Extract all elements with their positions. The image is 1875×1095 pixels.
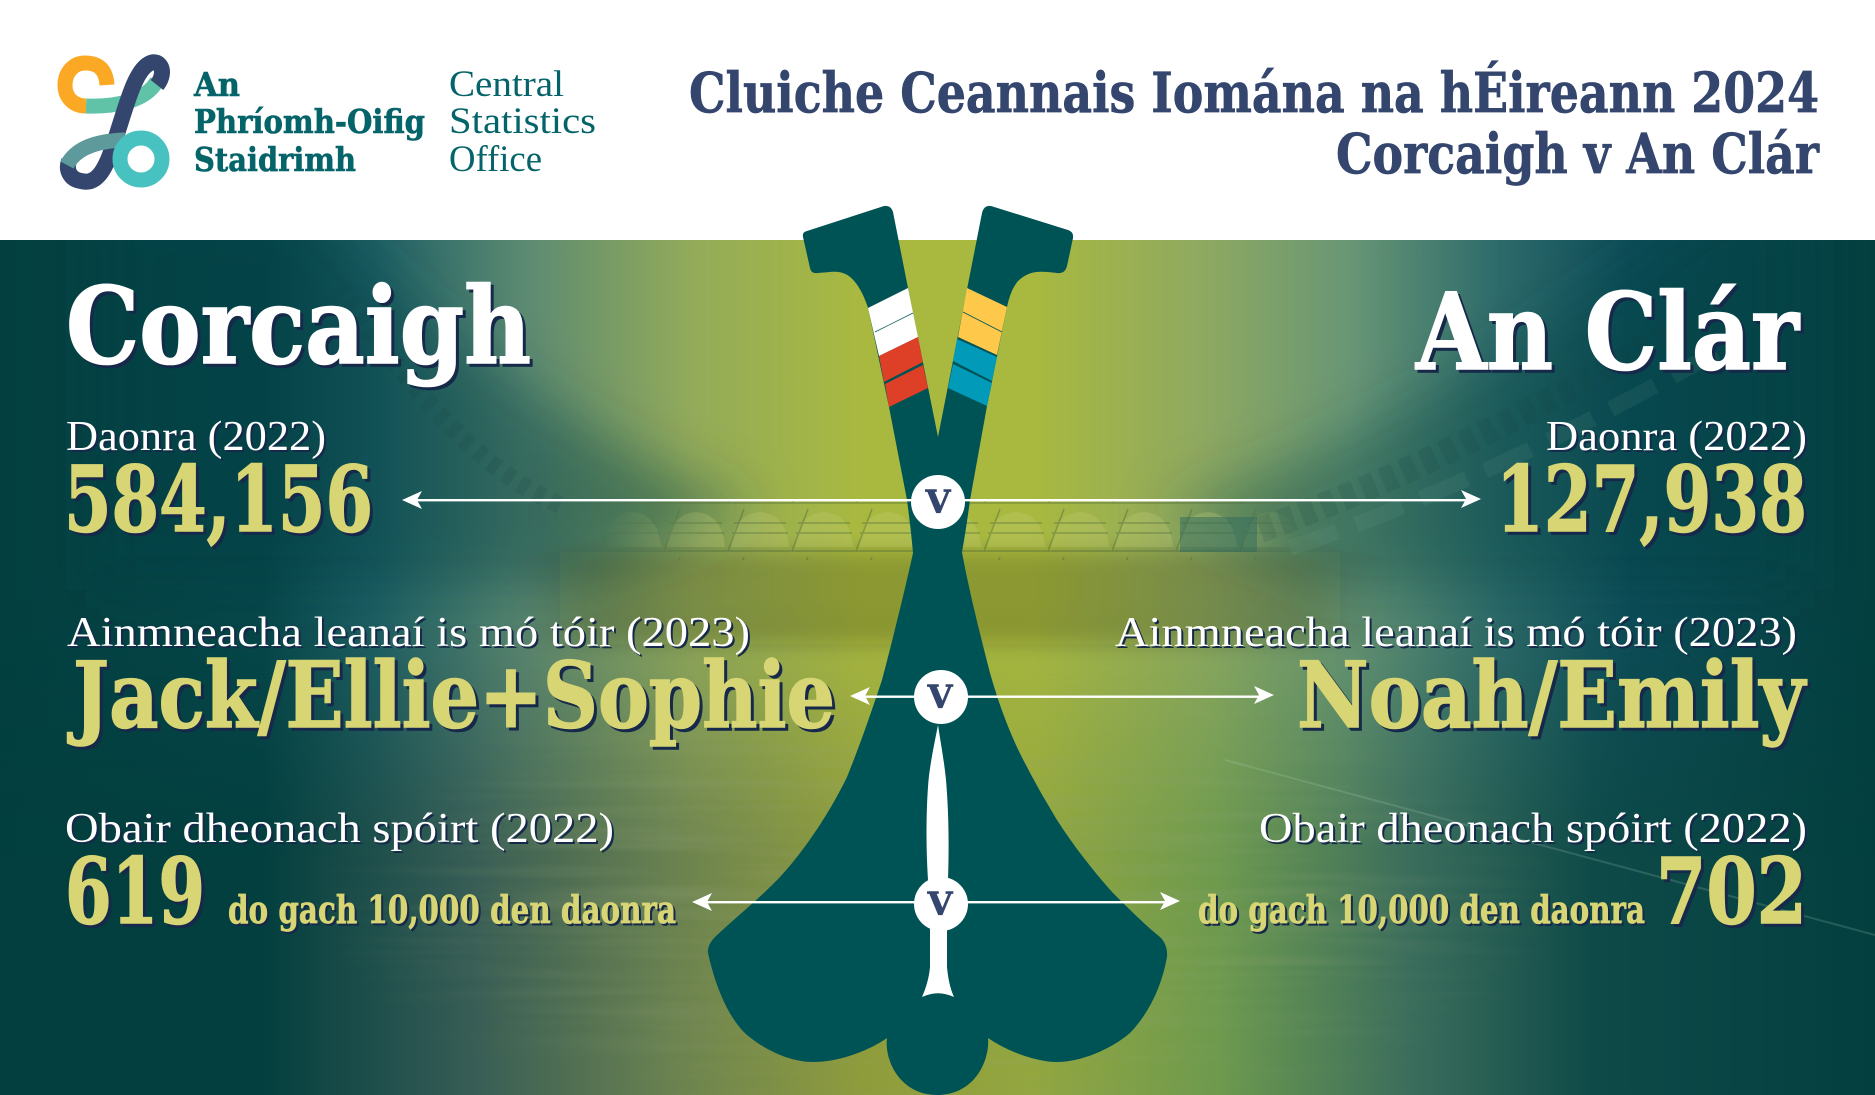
versus badge 3: V: [927, 885, 954, 923]
label: population: Daonra (2022): [1546, 414, 1807, 460]
value: population: 584,156: [64, 447, 373, 553]
value: volunteering: 619: [65, 839, 205, 945]
crossed hurleys silhouette: [708, 206, 1167, 1095]
logo text: English name: Office: [449, 139, 542, 180]
arrow: population: [402, 490, 1481, 509]
versus badge 3: [914, 877, 968, 931]
logo text: Irish name: An: [193, 65, 240, 104]
value: baby names: Jack/Ellie+Sophie: [67, 643, 835, 749]
title: [689, 60, 1820, 186]
value: volunteering: 702: [1656, 839, 1807, 945]
arrow: volunteering: [692, 892, 1180, 911]
versus badge 1: [911, 475, 965, 529]
heading: An Clár: An Clár: [1415, 269, 1800, 394]
unit: volunteering: do gach 10,000 den daonra: [1198, 887, 1645, 932]
versus badge 1: V: [925, 483, 952, 521]
versus badge 2: [914, 670, 968, 724]
versus badge 2: V: [927, 678, 954, 716]
header background: [0, 0, 1875, 240]
icon: CSO knot logo: [65, 62, 162, 182]
label: baby names: Ainmneacha leanaí is mó tóir (2023): [1115, 610, 1797, 656]
logo text: English name: [449, 64, 596, 180]
logo text: Irish name: Phríomh-Oifig: [194, 102, 425, 141]
label: volunteering: Obair dheonach spóirt (2022): [65, 806, 614, 852]
logo text: English name: Statistics: [449, 101, 596, 142]
heading: Corcaigh: Corcaigh: [66, 263, 531, 388]
hurley centre gap: [922, 725, 954, 997]
logo text: Irish name: [193, 65, 425, 179]
label: volunteering: Obair dheonach spóirt (2022): [1259, 806, 1807, 852]
logo: [65, 62, 596, 182]
panel: Cork statistics: [64, 263, 835, 945]
label: population: Daonra (2022): [66, 414, 326, 460]
logo text: English name: Central: [449, 64, 564, 105]
logo text: Irish name: Staidrimh: [194, 140, 356, 179]
Clare bands: yellow and blue: [948, 288, 1007, 406]
hurley illustration: [708, 206, 1167, 1095]
label: baby names: Ainmneacha leanaí is mó tóir (2023): [67, 610, 750, 656]
value: baby names: Noah/Emily: [1297, 643, 1808, 749]
arrow: baby names: [850, 686, 1274, 705]
panel: Clare statistics: [1115, 269, 1808, 945]
Cork bands: white and red: [868, 288, 928, 407]
unit: volunteering: do gach 10,000 den daonra: [228, 887, 676, 932]
